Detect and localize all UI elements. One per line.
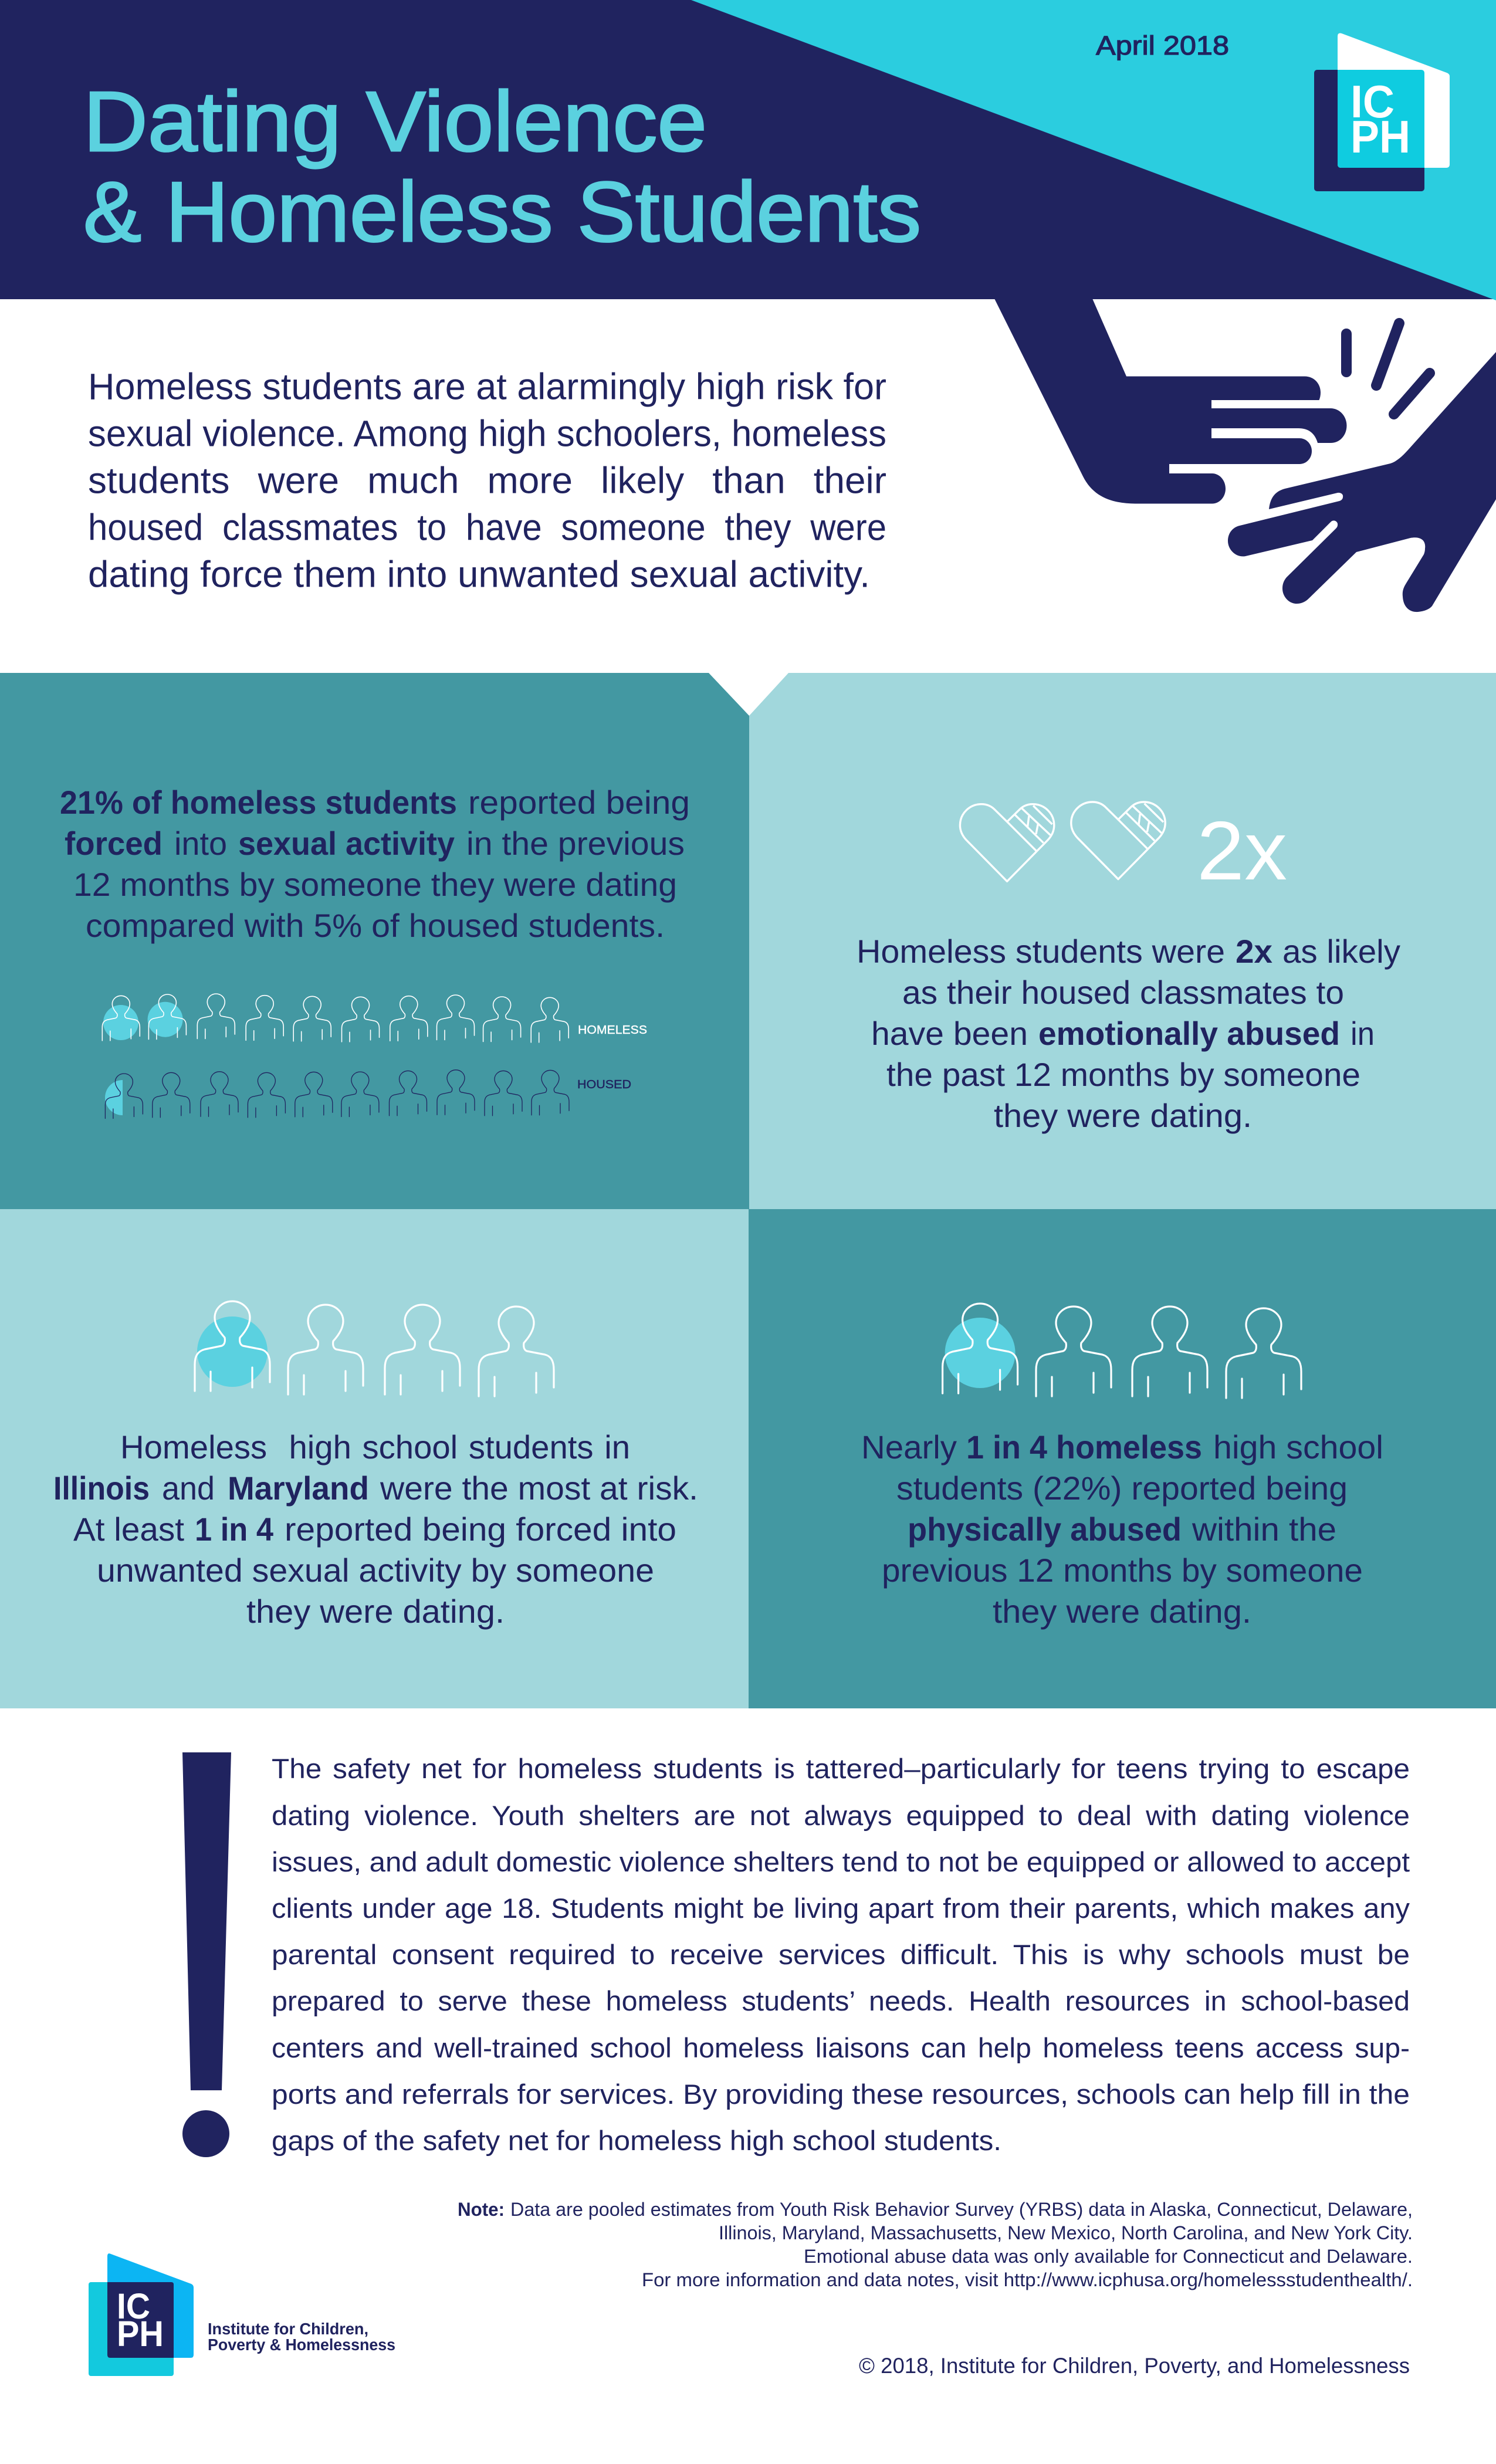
data note: Illinois, Maryland, Massachusetts, New Mexico, North Carolina, and New York City. [719,2222,1413,2243]
body paragraph: prepared to serve these homeless students’ needs. Health resources in school-based [272,1985,1410,2016]
chart: homeless pictogram [102,994,647,1043]
statistic text: in the previous [466,825,685,862]
cyan corner triangle [691,0,1496,300]
icon: recoiling hand [1228,352,1496,612]
statistic text: 21% of homeless students [60,784,457,821]
statistic text: students (22%) reported being [896,1470,1348,1507]
title [83,74,921,259]
statistic text: have been [871,1015,1028,1052]
statistic text: physically abused [908,1511,1182,1548]
logo: ICPH header: PH [1351,111,1410,163]
statistic text: previous 12 months by someone [882,1552,1363,1589]
data note: Note: [458,2199,505,2220]
logo: ICPH header [1314,33,1450,191]
panel: physical abuse [749,1209,1496,1708]
body paragraph: parental consent required to receive services difficult. This is why schools must be [272,1939,1410,1970]
body paragraph: issues, and adult domestic violence shelters tend to not be equipped or allowed to accept [272,1846,1410,1877]
statistic text: Nearly [861,1429,957,1465]
chart: housed pictogram: HOUSED [577,1078,631,1091]
body paragraph: centers and well-trained school homeless liaisons can help homeless teens access sup- [272,2032,1410,2063]
logo: ICPH footer: IC [117,2286,150,2326]
statistic text: the past 12 months by someone [886,1056,1360,1093]
intro text: housed classmates to have someone they were [88,507,886,548]
panel: emotional abuse [749,673,1496,1209]
copyright: © 2018, Institute for Children, Poverty, and Homelessness [859,2354,1410,2378]
statistic text: 2x [1236,933,1272,970]
icon: striking hand [994,299,1347,503]
body paragraph [272,1753,1410,2156]
panel: forced sexual activity [0,673,749,1209]
intro text: students were much more likely than their [88,460,886,501]
statistic text: Homeless high school students in [120,1429,630,1465]
data note: For more information and data notes, visit http://www.icphusa.org/homelessstudenthealth/. [642,2269,1413,2290]
statistic text: Homeless students were [857,933,1225,970]
intro text: dating force them into unwanted sexual activity. [88,554,870,595]
chart: housed pictogram [105,1070,631,1118]
body paragraph: dating violence. Youth shelters are not always equipped to deal with dating violence [272,1800,1410,1831]
data note: Emotional abuse data was only available for Connecticut and Delaware. [804,2246,1413,2267]
statistic text: were the most at risk. [380,1470,698,1507]
chart: 1 in 4 pictogram [195,1301,554,1396]
statistic text: into [174,825,227,862]
icon: exclamation mark [182,1752,231,2157]
data note [458,2199,1413,2290]
body paragraph: The safety net for homeless students is tattered–particularly for teens trying to escape [272,1753,1410,1784]
organization name: Poverty & Homelessness [208,2336,395,2354]
statistic text: 1 in 4 [195,1511,273,1548]
statistic text: reported being [468,784,690,821]
statistic text: they were dating. [993,1593,1251,1630]
logo: ICPH footer [89,2253,395,2376]
statistic text: Maryland [228,1470,369,1507]
statistic text: emotionally abused [1038,1015,1340,1052]
body paragraph: ports and referrals for services. By providing these resources, schools can help fill in the [272,2079,1410,2110]
header band [0,0,1496,300]
statistic text [857,933,1400,1134]
statistic text: they were dating. [994,1097,1252,1134]
statistic text: as their housed classmates to [902,974,1344,1011]
icon: bandaged hearts [960,802,1165,881]
statistic text: Illinois [53,1470,150,1507]
statistic text [60,784,690,944]
logo: ICPH header: IC [1351,76,1395,127]
2x figure: 2x [1197,804,1287,898]
statistic text: At least [73,1511,184,1548]
statistic text: reported being forced into [285,1511,676,1548]
intro text [88,366,886,595]
statistic text: 1 in 4 homeless [966,1429,1202,1465]
statistic text: and [162,1470,215,1507]
statistic text: high school [1213,1429,1383,1465]
title: & Homeless Students [83,164,921,259]
chart: homeless pictogram: HOMELESS [578,1024,647,1037]
statistic text [53,1429,698,1630]
statistic text: in [1351,1015,1375,1052]
intro text: Homeless students are at alarmingly high risk for [88,366,886,407]
statistic text: unwanted sexual activity by someone [97,1552,654,1589]
intro text: sexual violence. Among high schoolers, homeless [88,413,886,454]
statistic text: 12 months by someone they were dating [73,866,677,903]
statistic text: compared with 5% of housed students. [86,907,665,944]
chart: 1 in 4 pictogram [943,1304,1301,1398]
statistic text: forced [65,825,163,862]
statistic text [861,1429,1383,1630]
data note: Data are pooled estimates from Youth Risk Behavior Survey (YRBS) data in Alaska, Connecticut, Delaware, [510,2199,1413,2220]
logo: ICPH footer: PH [117,2314,164,2354]
icon: impact lines [1346,323,1430,414]
body paragraph: clients under age 18. Students might be living apart from their parents, which makes any [272,1893,1410,1924]
panel: state risk [0,1209,749,1708]
title: Dating Violence [83,74,707,169]
statistic text: within the [1192,1511,1336,1548]
organization name: Institute for Children, [208,2320,368,2338]
date: April 2018 [1096,31,1229,60]
statistic text: they were dating. [246,1593,505,1630]
statistic text: as likely [1282,933,1400,970]
body paragraph: gaps of the safety net for homeless high school students. [272,2125,1001,2156]
organization name [208,2320,395,2354]
statistic text: sexual activity [238,825,455,862]
